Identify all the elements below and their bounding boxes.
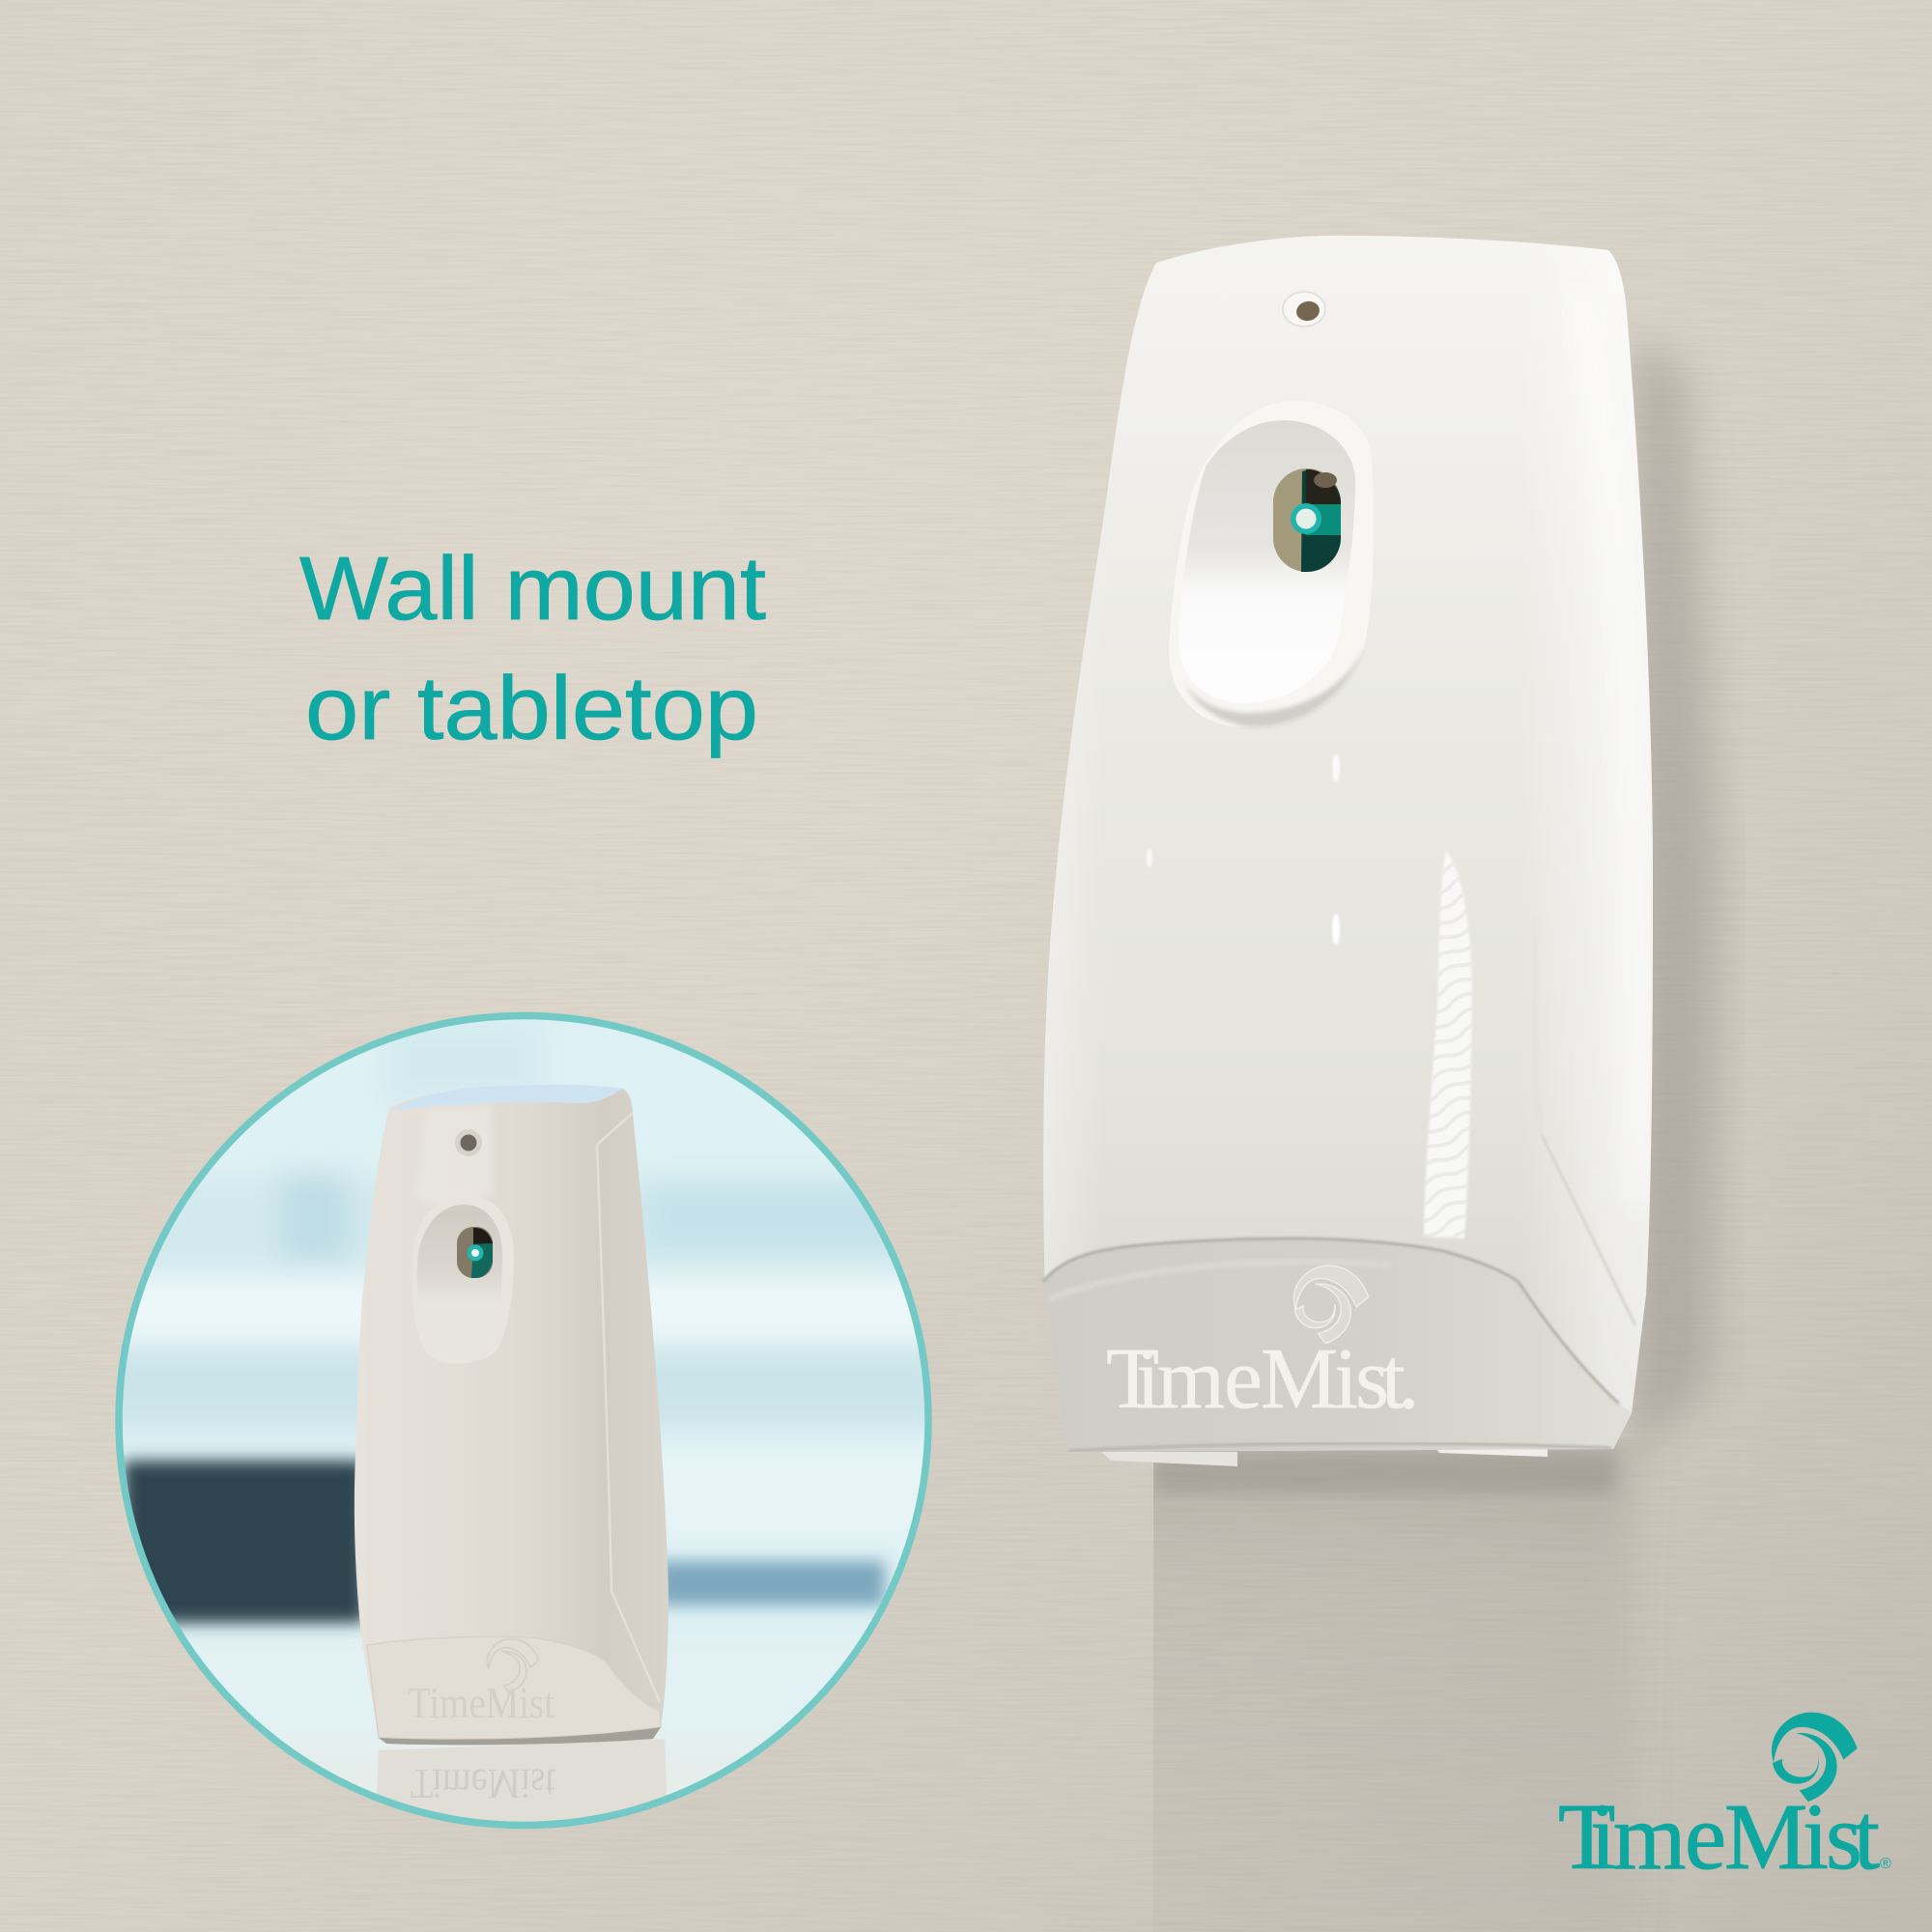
embossed TimeMist wordmark: TimeMist. [1106,1331,1420,1427]
nozzle window [1273,469,1341,572]
inset feet shadow [379,1727,661,1745]
inset nozzle recess [412,1195,514,1364]
inset blurred background [122,1019,925,1795]
dispenser feet [1101,1444,1548,1466]
inset nozzle window [457,1227,493,1278]
inset embossed logo [408,1639,554,1727]
inset photo: tabletop dispenser [115,1012,932,1830]
inset reflection patch [417,1105,493,1208]
inset embossed logo: TimeMist [408,1678,554,1727]
main wall-mounted dispenser [1043,236,1653,1466]
embossed swirl logo [1293,1265,1369,1344]
inset teal ring [119,1016,928,1826]
inset reflection on table: TimeMist [411,1760,555,1807]
side panel crease [1542,1135,1636,1325]
registered mark: ® [1880,1856,1891,1872]
inset dispenser body [355,1085,668,1739]
logo swirl icon [1772,1713,1858,1802]
heading: wall mount or tabletop: or tabletop [305,658,758,758]
TimeMist brand logo [1558,1713,1891,1889]
wall shadow of dispenser [1111,338,1719,1932]
heading: wall mount or tabletop: Wall mount [299,538,766,639]
gloss reflections [1147,754,1478,1241]
dispenser body [1043,236,1653,1452]
dispenser base [1043,1238,1632,1452]
mist hole [1283,292,1325,327]
inset mist hole [455,1129,482,1156]
inset reflection on table [377,1739,667,1822]
heading: wall mount or tabletop [299,538,766,758]
inset side panel crease [597,1113,660,1702]
inset base [367,1636,661,1739]
recess around nozzle [1169,401,1374,727]
logo wordmark: TimeMist [1558,1785,1880,1889]
